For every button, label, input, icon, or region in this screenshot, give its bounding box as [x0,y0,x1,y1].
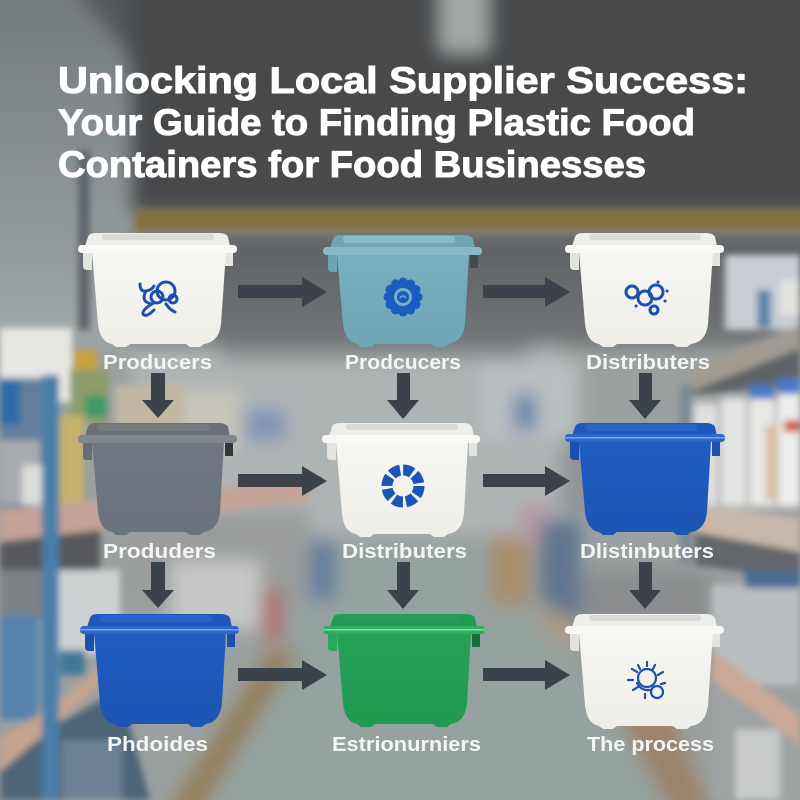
arrow: down right row one [629,373,661,419]
container: blue distributers [565,423,725,535]
icon: recycle ring [387,470,419,502]
title [58,60,748,185]
title: Containers for Food Businesses [58,144,646,185]
container: white distributers center [322,423,480,537]
label: producers 1: Producers [103,352,212,374]
label: distributers 2: Distributers [342,541,467,563]
label: distributers 1: Distributers [586,352,710,374]
icon: sun and circles [628,662,665,698]
arrow: down left row two [142,562,174,608]
label: producers 2: Prodcucers [345,352,461,374]
arrow: top middle to right [483,277,570,307]
title: Unlocking Local Supplier Success: [58,60,748,101]
arrow: down right row two [629,562,661,609]
title: Your Guide to Finding Plastic Food [58,102,695,143]
container: white distributers [565,233,724,347]
label: estrionurniers: Estrionurniers [332,734,481,756]
container: green estrionurniers [323,614,485,727]
icon: gear flower [388,282,418,312]
arrow: row three left to middle [238,660,327,690]
container: teal producers [323,235,482,347]
label: distributers 3: Dlistinbuters [580,541,714,563]
arrow: row two left to middle [238,466,327,496]
arrow: down middle row one [387,373,419,419]
arrow: down middle row two [387,562,419,609]
container: white the process [565,614,724,729]
icon: bubbles [626,282,667,314]
label: the process: The process [587,734,714,756]
label: producers 3: Produders [103,541,216,563]
container: white producers [78,233,237,347]
arrow: row three middle to right [483,660,570,690]
right shelving [725,255,800,330]
left shelving [0,328,72,402]
container: blue phdoides [80,614,239,727]
arrow: top left to middle [238,277,327,307]
arrow: down left row one [142,373,174,418]
arrow: row two middle to right [483,466,570,496]
label: phdoides: Phdoides [107,734,208,756]
icon: swirl [140,282,177,315]
container: gray producers [78,423,237,535]
